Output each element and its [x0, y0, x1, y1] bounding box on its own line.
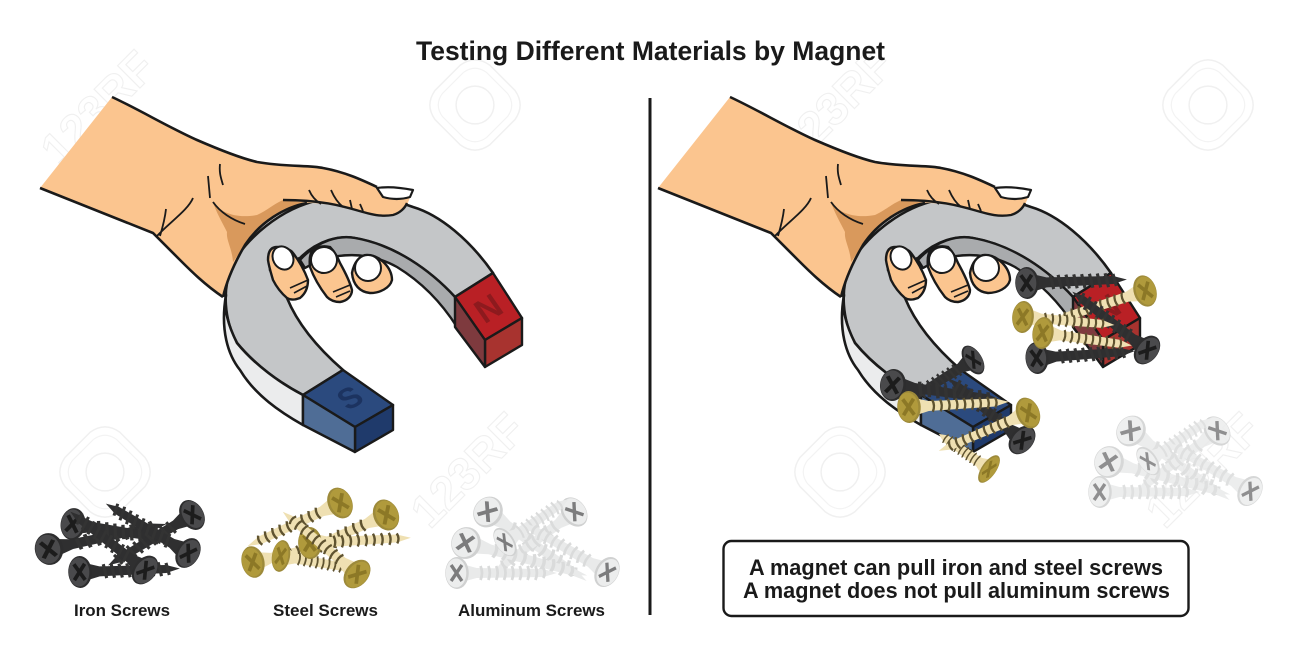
- callout line 1: A magnet can pull iron and steel screws: [749, 555, 1163, 580]
- panel: hand holding magnet with attracted screws (right): [658, 97, 1166, 486]
- magnet north pole letter: N: [467, 287, 510, 331]
- steel screws group: [238, 483, 412, 594]
- label: steel screws: Steel Screws: [273, 602, 378, 620]
- watermark: stock logos: [30, 38, 1270, 537]
- aluminum screws not attracted: [1088, 405, 1268, 513]
- screws attracted to south pole: [878, 342, 1045, 486]
- callout box: [724, 541, 1188, 616]
- divider between panels: [648, 98, 652, 615]
- watermark: stock logos: 123RF: [768, 38, 903, 172]
- iron screws group: [32, 490, 210, 589]
- watermark: stock logos: 123RF: [400, 403, 535, 537]
- callout line 2: A magnet does not pull aluminum screws: [743, 578, 1170, 603]
- panel: hand holding magnet (left): [40, 97, 522, 452]
- south pole letter: S: [948, 380, 989, 416]
- title: Testing Different Materials by Magnet: [416, 36, 885, 66]
- magnet south pole letter: S: [330, 380, 371, 416]
- screws attracted to north pole: [1011, 264, 1166, 375]
- label: aluminum screws: Aluminum Screws: [458, 602, 605, 620]
- watermark: stock logos: 123RF: [1135, 403, 1270, 537]
- label: iron screws: Iron Screws: [74, 602, 170, 620]
- watermark: stock logos: 123RF: [30, 41, 165, 175]
- aluminum screws group: [445, 486, 625, 594]
- north pole letter: N: [1085, 287, 1128, 331]
